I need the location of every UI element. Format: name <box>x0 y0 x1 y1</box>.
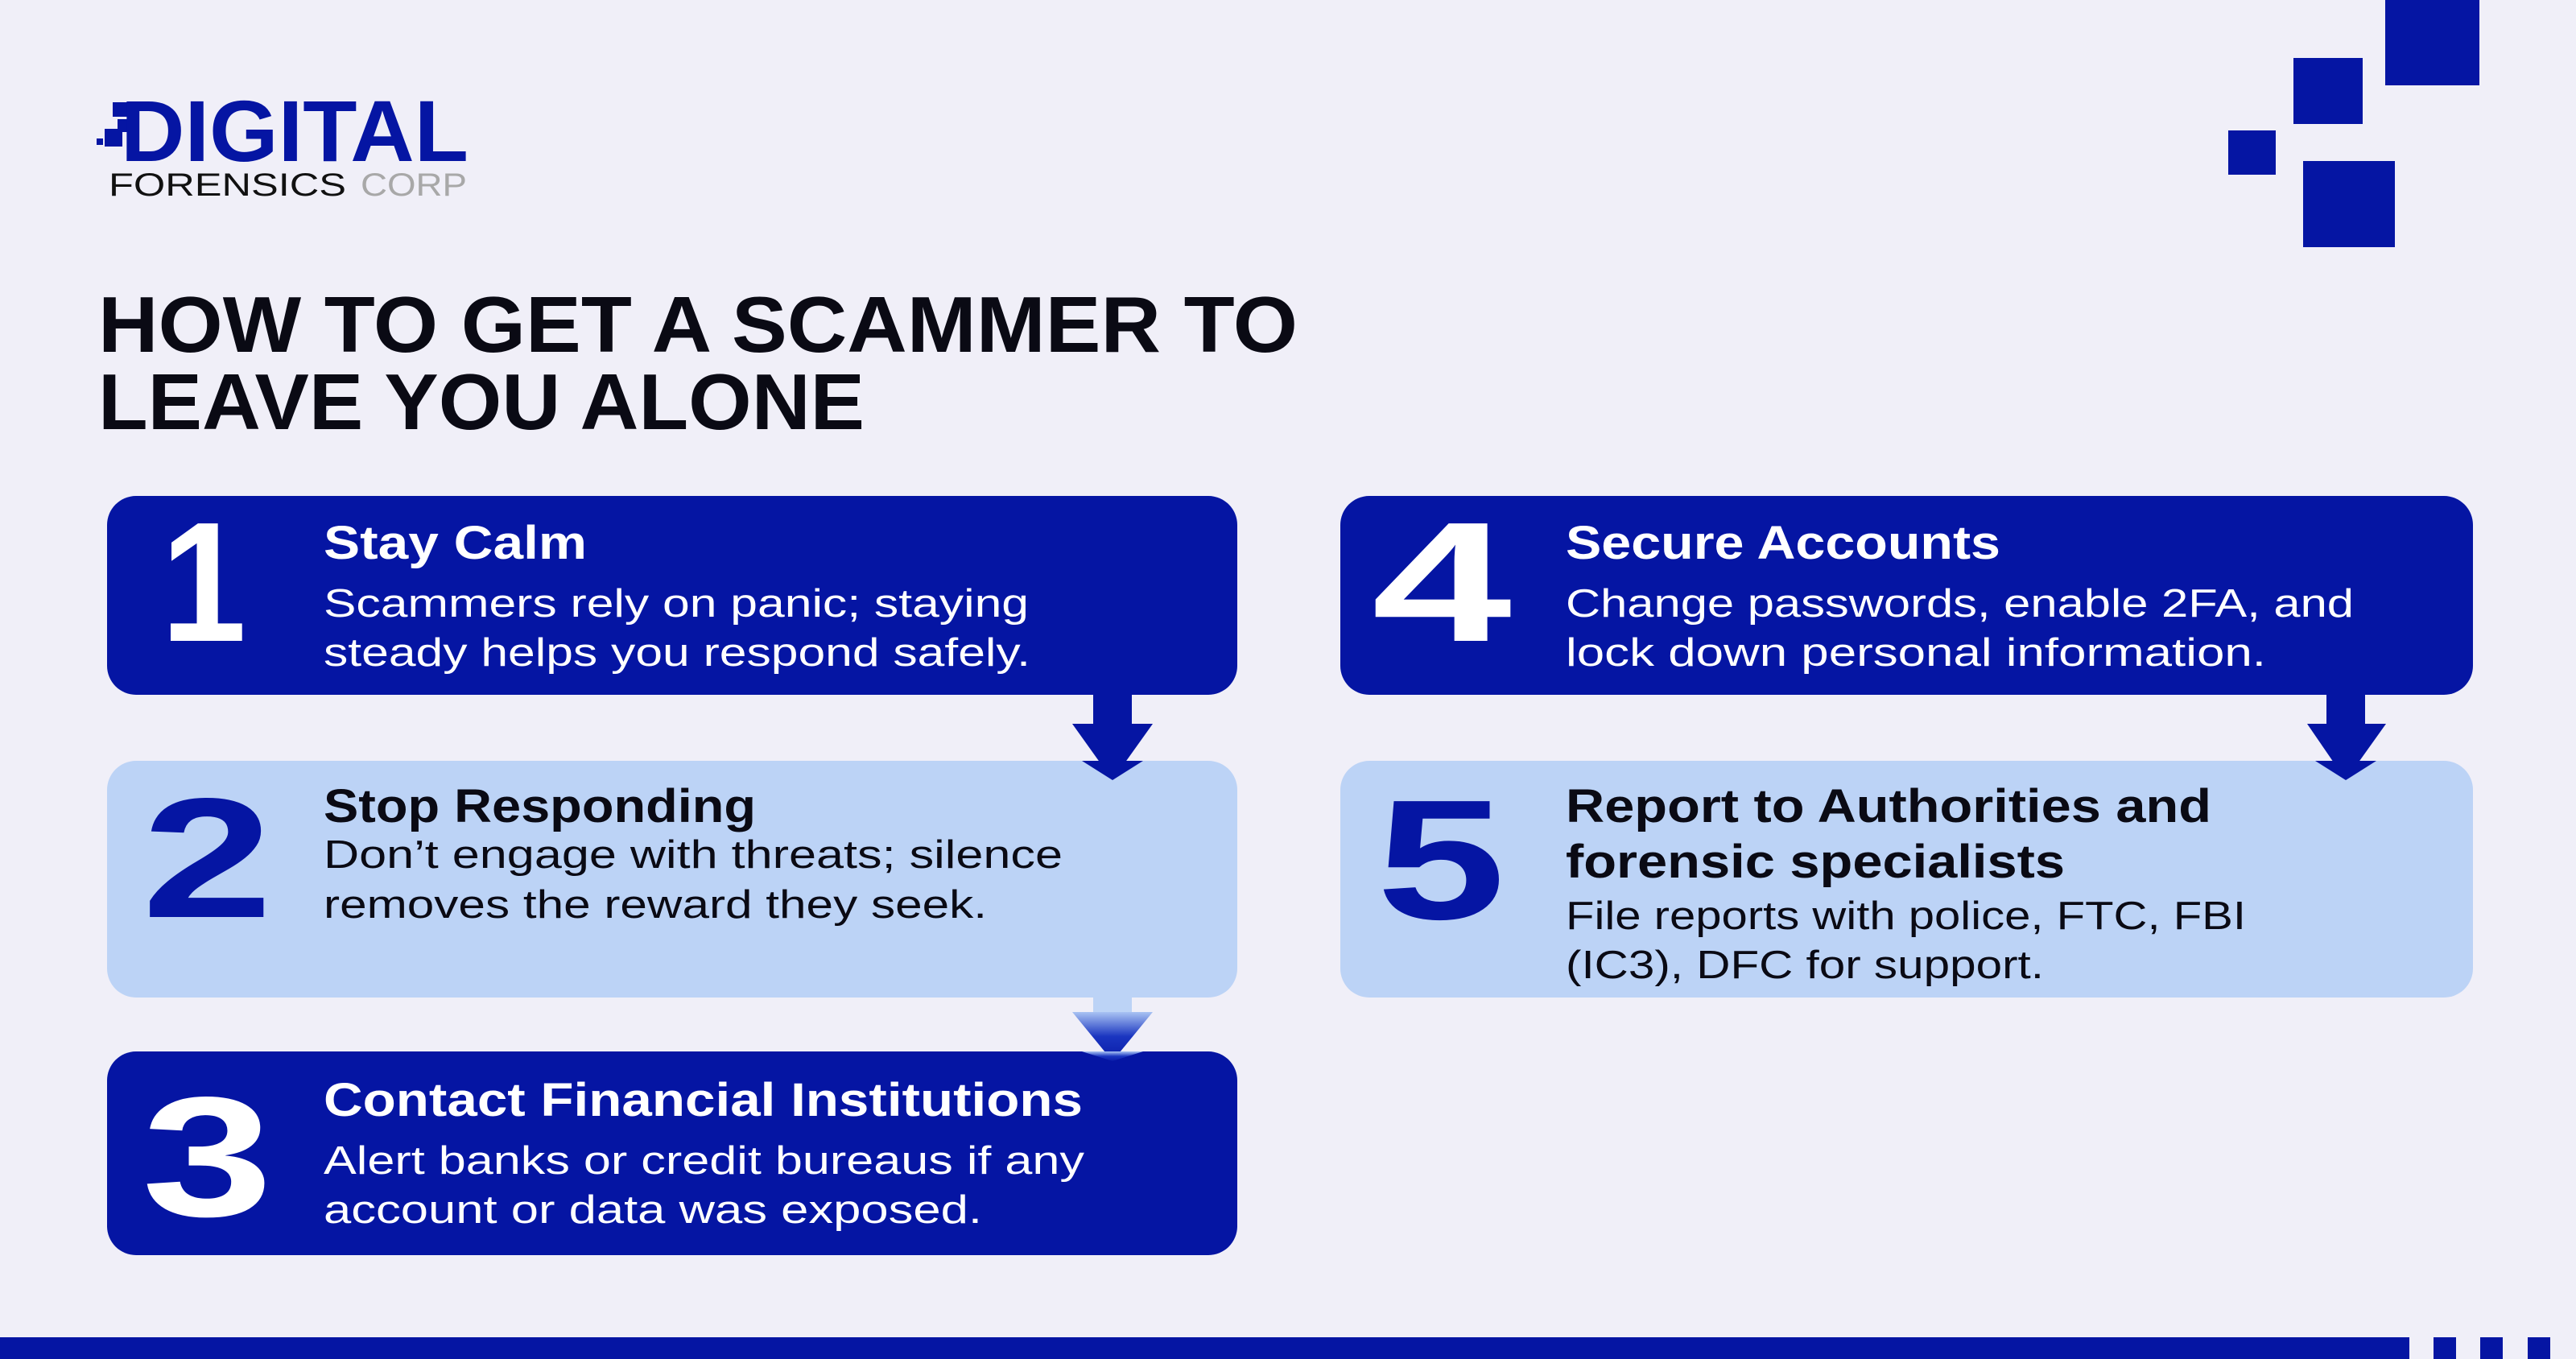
panel: step 5: Report to Authorities and <box>1566 780 2211 832</box>
decorative squares top right <box>2228 0 2479 247</box>
panel: step 1: Scammers rely on panic; staying <box>324 582 1029 626</box>
panel: step 4: lock down personal information. <box>1566 631 2266 675</box>
panel: step 1: Stay Calm <box>324 517 587 569</box>
panel: step 2 <box>107 761 1237 998</box>
logo: CORP <box>361 167 467 203</box>
panel: step 2: Stop Responding <box>324 780 756 832</box>
title: LEAVE YOU ALONE <box>98 357 865 446</box>
panel: step 1: steady helps you respond safely. <box>324 631 1030 675</box>
logo: FORENSICS <box>109 167 346 203</box>
arrow: 2 to 3 <box>1072 990 1153 1061</box>
panel: step 2: Don’t engage with threats; silence <box>324 833 1063 877</box>
panel: step 5: File reports with police, FTC, FBI <box>1566 894 2246 938</box>
panel: step 1: 1 <box>161 486 246 677</box>
panel: step 2: removes the reward they seek. <box>324 883 987 927</box>
panel: step 5: (IC3), DFC for support. <box>1566 944 2044 987</box>
panel: step 3: Alert banks or credit bureaus if any <box>324 1139 1085 1183</box>
panel: step 1 <box>107 486 1237 695</box>
panel: step 4: 4 <box>1372 486 1512 677</box>
title <box>98 280 1298 446</box>
panel: step 3: account or data was exposed. <box>324 1188 982 1232</box>
panel: step 3: Contact Financial Institutions <box>324 1074 1083 1126</box>
panel: step 3 <box>107 1051 1237 1255</box>
panel: step 4 <box>1340 486 2473 695</box>
panel: step 3: 3 <box>142 1061 273 1252</box>
panel: step 5: 5 <box>1377 764 1505 955</box>
logo: DIGITAL <box>121 82 469 180</box>
panel: step 5 <box>1340 761 2473 998</box>
footer bar <box>0 1337 2550 1359</box>
arrow: 4 to 5 <box>2307 688 2386 780</box>
panel: step 4: Change passwords, enable 2FA, and <box>1566 582 2354 626</box>
panel: step 5: forensic specialists <box>1566 836 2065 888</box>
panel: step 4: Secure Accounts <box>1566 517 2000 569</box>
panel: step 2: 2 <box>142 762 273 953</box>
title: HOW TO GET A SCAMMER TO <box>98 280 1298 369</box>
arrow: 1 to 2 <box>1072 688 1153 780</box>
